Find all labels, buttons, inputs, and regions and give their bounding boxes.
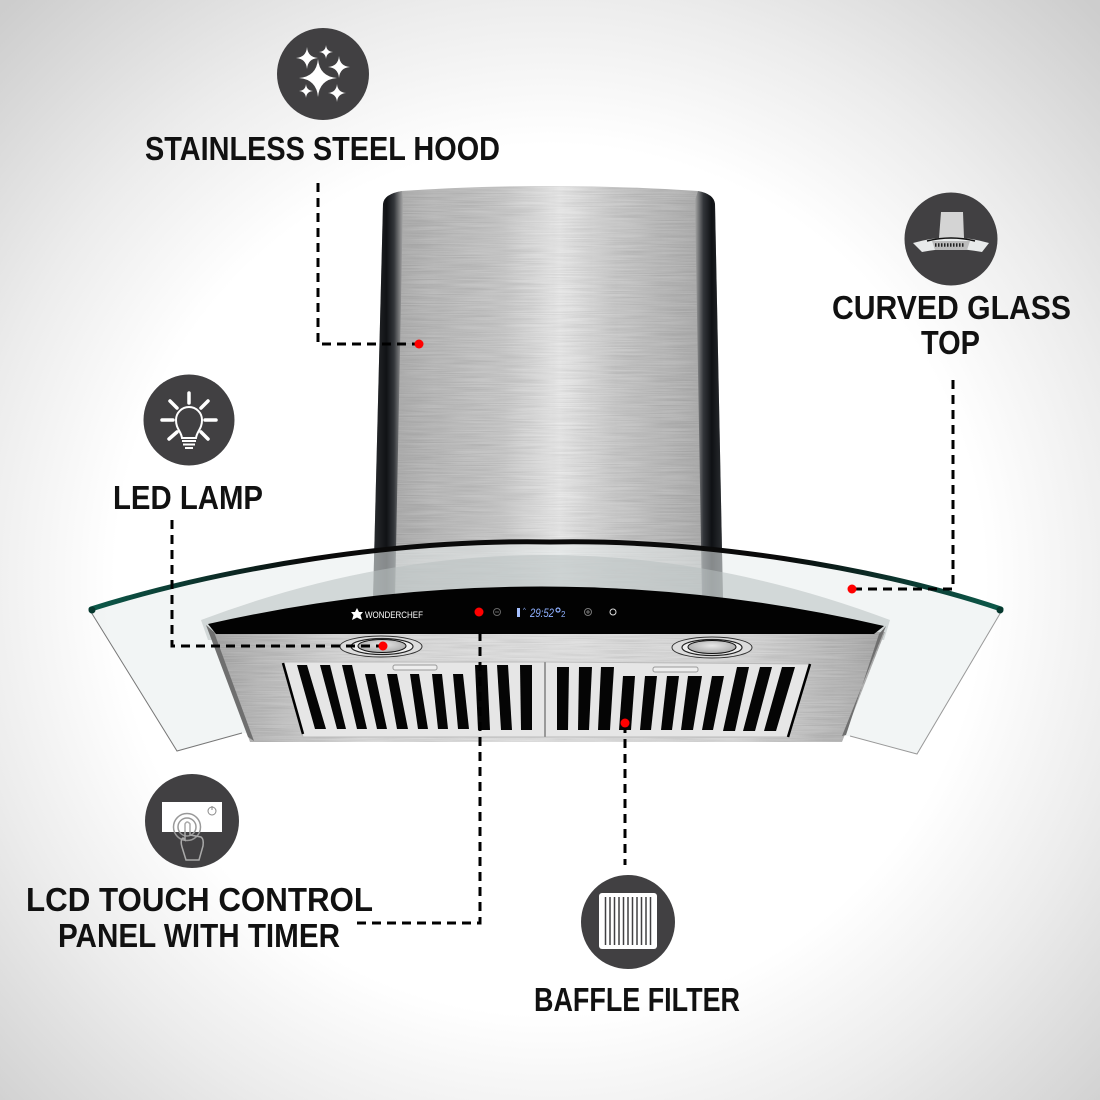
heading: curved glass top: TOP [921, 324, 980, 361]
callout line: baffle filter [620, 718, 630, 865]
icon: hood silhouette [904, 192, 998, 286]
heading: LCD touch control panel with timer [26, 881, 373, 954]
right lamp [672, 637, 752, 658]
icon: sparkles [277, 28, 369, 120]
touch buttons and timer display: 29:52 [529, 606, 554, 620]
baffle filters [282, 662, 810, 737]
stainless front panel [212, 632, 885, 742]
hood body [201, 555, 890, 742]
touch buttons and timer display: ^ [523, 608, 526, 614]
callout line: LED lamp [172, 520, 388, 650]
chimney duct [373, 186, 723, 600]
icon: light bulb [144, 374, 234, 466]
hood inner band [201, 555, 890, 640]
heading: LCD touch control panel with timer: PANEL WITH TIMER [58, 917, 340, 954]
heading: curved glass top [832, 289, 1071, 361]
heading: LCD touch control panel with timer: LCD TOUCH CONTROL [26, 881, 373, 918]
heading: LED lamp: LED LAMP [113, 479, 263, 516]
callout line: LCD touch control panel [357, 608, 484, 923]
icon: baffle filter [581, 875, 675, 969]
heading: stainless steel hood: STAINLESS STEEL HOOD [145, 130, 500, 167]
curved glass canopy [88, 541, 1004, 754]
brand logo [351, 608, 423, 621]
touch buttons and timer display [494, 606, 616, 620]
brand logo: WONDERCHEF [365, 610, 423, 621]
left lamp [340, 636, 422, 657]
heading: baffle filter: BAFFLE FILTER [534, 981, 740, 1018]
callout line: curved glass top [848, 380, 953, 594]
touch buttons and timer display: 2 [561, 610, 566, 619]
icon: touch panel [145, 774, 239, 868]
black control panel [208, 586, 884, 634]
heading: curved glass top: CURVED GLASS [832, 289, 1071, 326]
callout line: stainless steel hood [318, 183, 424, 348]
